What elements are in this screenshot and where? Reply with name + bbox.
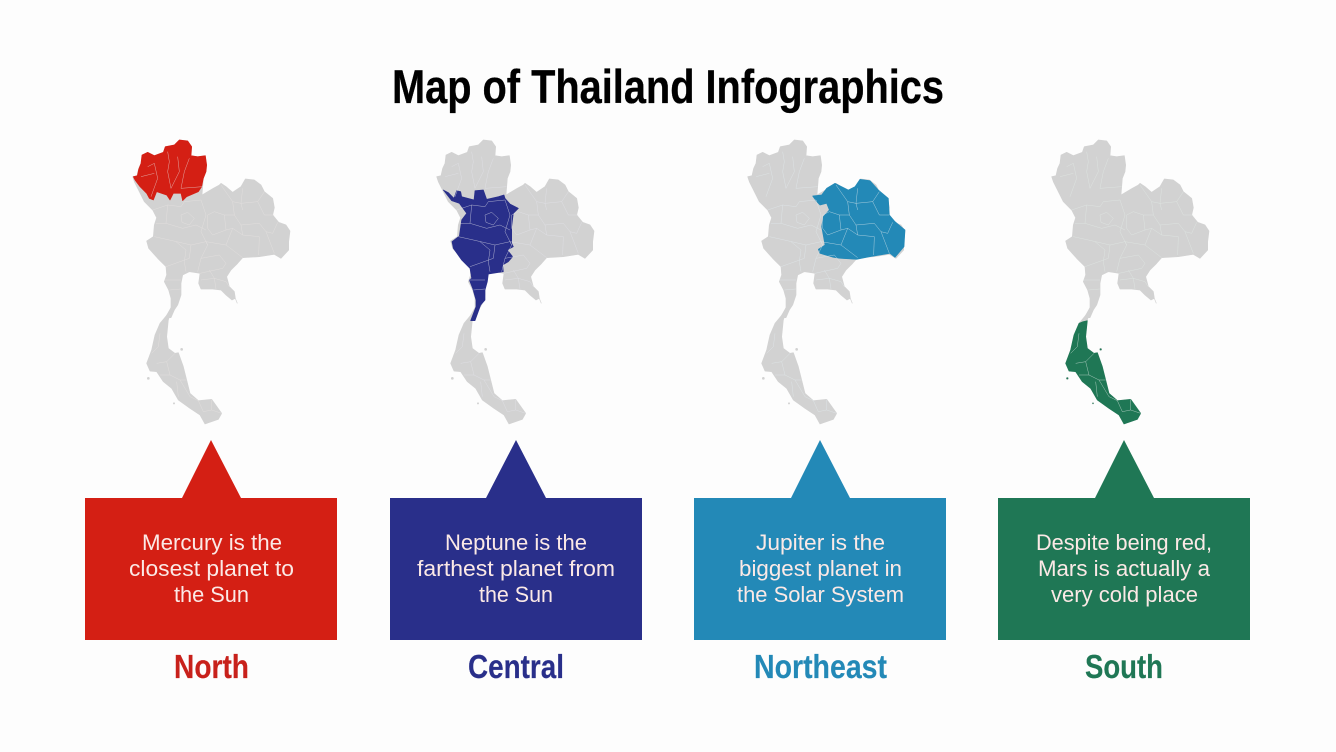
label: northeast: Northeast (754, 648, 887, 685)
text: central description: farthest planet from (417, 556, 615, 581)
text: northeast description (737, 530, 904, 607)
panel: north (85, 140, 337, 685)
text: north description: Mercury is the (142, 530, 282, 555)
callout: central (390, 440, 642, 640)
text: central description: Neptune is the (445, 530, 587, 555)
text: south description: Mars is actually a (1038, 556, 1211, 581)
text: northeast description: the Solar System (737, 582, 904, 607)
title: Map of Thailand Infographics (392, 60, 944, 113)
panel: northeast (694, 140, 946, 685)
text: south description: very cold place (1051, 582, 1198, 607)
text: south description: Despite being red, (1036, 530, 1212, 555)
text: north description: the Sun (174, 582, 249, 607)
callout: north (85, 440, 337, 640)
text: north description (129, 530, 294, 607)
label: north: North (174, 648, 249, 685)
text: northeast description: Jupiter is the (756, 530, 885, 555)
map: south region highlighted (1052, 140, 1209, 424)
text: central description: the Sun (479, 582, 553, 607)
callout: south (998, 440, 1250, 640)
map: northeast region highlighted (748, 140, 905, 424)
panel: central (390, 140, 642, 685)
label: south: South (1085, 648, 1163, 685)
text: north description: closest planet to (129, 556, 294, 581)
text: south description (1036, 530, 1212, 607)
map: central region highlighted (437, 140, 594, 424)
text: northeast description: biggest planet in (739, 556, 902, 581)
map: north region highlighted (133, 140, 290, 424)
text: central description (417, 530, 615, 607)
callout: northeast (694, 440, 946, 640)
panel: south (998, 140, 1250, 685)
label: central: Central (468, 648, 564, 685)
